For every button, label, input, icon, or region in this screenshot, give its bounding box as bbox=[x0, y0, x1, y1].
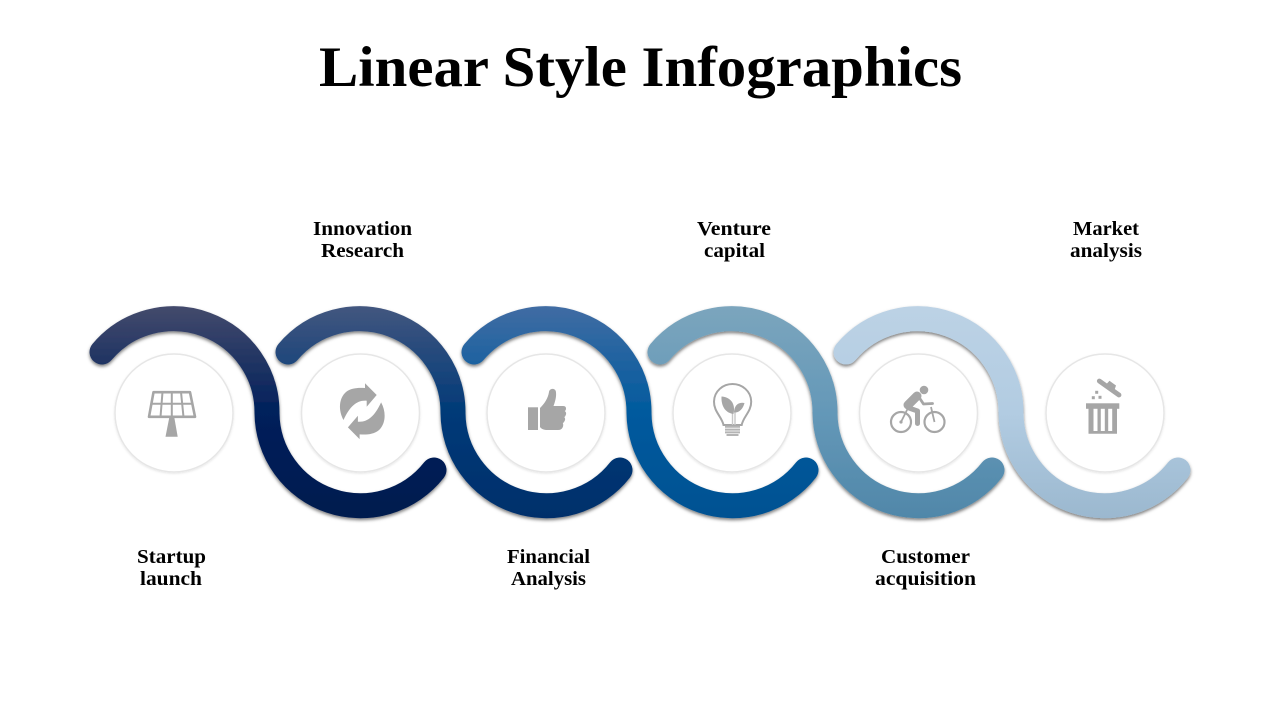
arc 2 bbox=[288, 319, 620, 506]
arc 4 bbox=[660, 319, 992, 506]
label: Startup launch: launch bbox=[140, 568, 202, 590]
step 2: refresh bbox=[302, 354, 420, 472]
label: Innovation Research: Innovation bbox=[313, 218, 412, 240]
label: Financial Analysis: Financial bbox=[507, 546, 590, 568]
title: Linear Style Infographics bbox=[319, 36, 962, 99]
label: Venture capital: capital bbox=[704, 240, 765, 262]
icon: thumbs up bbox=[528, 389, 566, 430]
icon: trash bin bbox=[1086, 381, 1119, 434]
step 4: bulb bbox=[673, 354, 791, 472]
label: Financial Analysis: Analysis bbox=[511, 568, 586, 590]
step 6: trash bin bbox=[1046, 354, 1164, 472]
label: Venture capital: Venture bbox=[697, 218, 771, 240]
arc 1 bbox=[102, 319, 434, 506]
arc 5 bbox=[846, 319, 1178, 506]
step 1: solar panel bbox=[115, 354, 233, 472]
icon: refresh arrows bbox=[340, 383, 385, 439]
icon: solar panel bbox=[149, 392, 195, 437]
step 5: cyclist bbox=[860, 354, 978, 472]
arc 3 bbox=[474, 319, 806, 506]
icon: cyclist bbox=[891, 386, 944, 432]
label: Startup launch: Startup bbox=[137, 546, 206, 568]
label: Customer acquisition: Customer bbox=[881, 546, 970, 568]
wave connector bbox=[102, 319, 1178, 506]
label: Market analysis: analysis bbox=[1070, 240, 1142, 262]
label: Market analysis: Market bbox=[1073, 218, 1139, 240]
icon: plant bulb bbox=[714, 384, 751, 435]
step 3: thumbs up bbox=[487, 354, 605, 472]
label: Customer acquisition: acquisition bbox=[875, 568, 976, 590]
label: Innovation Research: Research bbox=[321, 240, 404, 262]
